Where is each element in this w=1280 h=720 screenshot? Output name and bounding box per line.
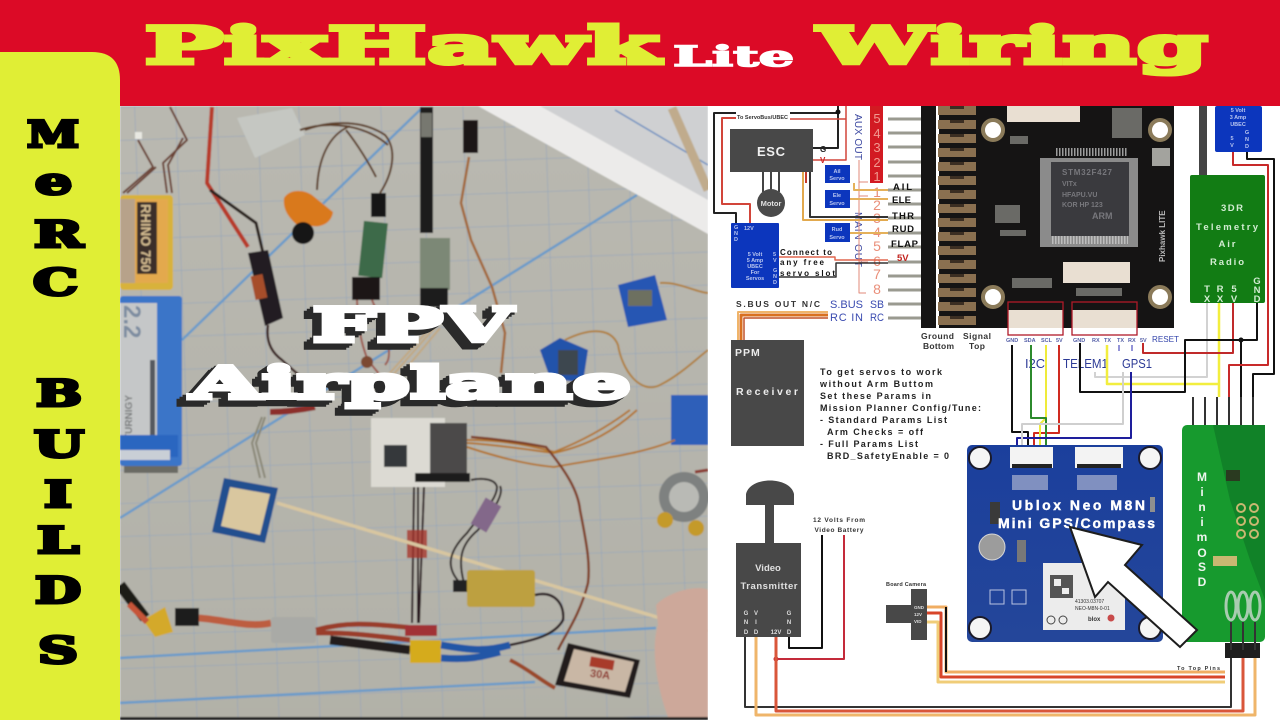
port labels I2C TELEM1 GPS1 bbox=[1025, 356, 1152, 371]
port labels I2C TELEM1 GPS1: I2C bbox=[1025, 356, 1045, 371]
arm params instructions: Set these Params in bbox=[820, 391, 931, 401]
servo UBEC box: G bbox=[734, 225, 738, 231]
3DR telemetry air radio: Telemetry bbox=[1196, 222, 1259, 233]
PPM receiver box: Receiver bbox=[736, 386, 798, 398]
video transmitter: D bbox=[787, 630, 792, 636]
wooden pointer stick bbox=[277, 503, 708, 632]
servo UBEC box: For bbox=[751, 270, 760, 276]
motor: Motor bbox=[761, 199, 781, 208]
servo boxes: Ail bbox=[833, 169, 841, 175]
blue lipo battery: TURNIGY bbox=[124, 395, 135, 440]
video transmitter: N bbox=[787, 620, 791, 626]
M8N module: blox bbox=[1088, 617, 1101, 623]
motor bbox=[757, 172, 785, 217]
minimOSD board: M bbox=[1197, 470, 1207, 484]
aux out red bar: 1 bbox=[873, 169, 881, 184]
aux out red bar: 4 bbox=[873, 126, 881, 141]
video module with wires bbox=[237, 108, 392, 193]
to top pins label: To Top Pins bbox=[1177, 666, 1220, 672]
GPS connectors bbox=[1010, 447, 1123, 468]
main out numbers: 2 bbox=[873, 197, 881, 213]
arm params instructions: - Standard Params List bbox=[820, 415, 947, 425]
pin labels: GND SDA SCL 5V and telemetry: TX bbox=[1104, 338, 1111, 344]
title: PixHawk Lite Wiring: Lite bbox=[673, 40, 794, 73]
pin labels: GND SDA SCL 5V and telemetry: GND bbox=[1006, 338, 1018, 344]
left panel: MeRC BUILDS: U bbox=[34, 424, 84, 466]
S.BUS and RC labels: S.BUS OUT N/C bbox=[736, 299, 820, 309]
red power lead and small ESC bbox=[207, 107, 315, 412]
main out numbers: 8 bbox=[873, 281, 881, 297]
servo UBEC box: G bbox=[773, 268, 777, 274]
large white arrow pointing at GPS bbox=[1070, 527, 1197, 647]
GPS board title bbox=[998, 497, 1155, 531]
main out numbers: 7 bbox=[873, 266, 881, 282]
left panel: MeRC BUILDS: L bbox=[37, 520, 79, 562]
aux out and main out vertical labels: MAIN OUT bbox=[852, 212, 863, 267]
5V label: 5V bbox=[897, 253, 909, 264]
S.BUS and RC labels: RC IN bbox=[830, 312, 863, 324]
servo UBEC box: 5 bbox=[773, 252, 776, 258]
pin labels: GND SDA SCL 5V and telemetry: GND bbox=[1073, 338, 1085, 344]
video transmitter: G bbox=[787, 611, 792, 617]
3DR telemetry air radio: T bbox=[1204, 284, 1210, 295]
3DR telemetry air radio: V bbox=[1231, 294, 1238, 305]
pin labels: GND SDA SCL 5V and telemetry: 5V bbox=[1140, 338, 1147, 344]
minimOSD board bbox=[1182, 425, 1265, 642]
main out numbers: 6 bbox=[873, 253, 881, 269]
ground bottom signal top labels bbox=[921, 331, 991, 351]
mounting holes bbox=[969, 447, 1161, 639]
5 volt 3 amp UBEC: UBEC bbox=[1230, 122, 1246, 128]
video transmitter: N bbox=[744, 620, 748, 626]
arm params instructions: Arm Checks = off bbox=[827, 427, 924, 437]
servo boxes bbox=[825, 165, 850, 242]
pin labels: GND SDA SCL 5V and telemetry: RX bbox=[1092, 338, 1100, 344]
telemetry radio with antenna bbox=[388, 107, 450, 378]
S.BUS and RC labels: SB bbox=[870, 299, 884, 311]
3DR telemetry air radio: 3DR bbox=[1221, 203, 1243, 214]
photo title: FPV Airplane: Airplane bbox=[179, 365, 622, 415]
GPS board title: Ublox Neo M8N bbox=[1012, 497, 1145, 513]
GPS board title: Mini GPS/Compass bbox=[998, 515, 1155, 531]
board camera bbox=[886, 582, 927, 640]
left panel: MeRC BUILDS: C bbox=[33, 262, 78, 304]
5 volt 3 amp UBEC bbox=[1215, 106, 1262, 152]
left panel: MeRC BUILDS: D bbox=[35, 570, 81, 612]
servo channel labels: RUD bbox=[892, 224, 914, 235]
5 volt 3 amp UBEC: D bbox=[1245, 144, 1249, 150]
left panel: MeRC BUILDS bbox=[0, 52, 120, 720]
12 volts label: Video Battery bbox=[814, 527, 864, 534]
flight controller with servo wires bbox=[371, 410, 675, 650]
aux out and main out vertical labels bbox=[852, 114, 863, 267]
board silk text: Pixhawk LITE bbox=[1158, 210, 1167, 262]
servo boxes: Servo bbox=[829, 176, 845, 182]
OSD bottom connector bbox=[1225, 622, 1260, 658]
OSD top header pins bbox=[1193, 397, 1253, 428]
photo title: FPV Airplane bbox=[179, 298, 631, 415]
pin labels: GND SDA SCL 5V and telemetry bbox=[1006, 338, 1147, 344]
arm params instructions bbox=[819, 367, 981, 461]
main power harness bbox=[120, 585, 555, 688]
connect to any free servo slot note: servo slot bbox=[780, 269, 835, 278]
left panel: MeRC BUILDS: B bbox=[36, 373, 82, 415]
ground bottom signal top labels: Signal bbox=[963, 331, 991, 341]
camera wires to top pins bbox=[927, 607, 1225, 682]
orange FPV camera bbox=[284, 191, 333, 244]
PPM receiver box bbox=[731, 340, 804, 446]
pin labels: GND SDA SCL 5V and telemetry: 5V bbox=[1056, 338, 1063, 344]
main out numbers bbox=[873, 184, 881, 297]
STM32 processor bbox=[1040, 152, 1138, 247]
photo title: FPV Airplane: FPV bbox=[306, 302, 510, 356]
connect to any free servo slot note: Connect to bbox=[780, 248, 832, 257]
aux out and main out vertical labels: AUX OUT bbox=[852, 114, 863, 160]
servo UBEC box: D bbox=[734, 237, 738, 243]
3DR telemetry air radio: N bbox=[1254, 285, 1261, 296]
S.BUS and RC labels bbox=[736, 299, 884, 324]
STM32 processor: STM32F427 bbox=[1062, 168, 1113, 177]
3DR telemetry air radio: G bbox=[1253, 276, 1261, 287]
minimOSD board: m bbox=[1197, 530, 1207, 544]
servo UBEC box: V bbox=[773, 258, 777, 264]
GPS patch antenna bbox=[212, 417, 278, 543]
aux out red bar: 5 bbox=[873, 111, 881, 126]
thin main out bus bbox=[859, 160, 868, 293]
servo boxes: Ele bbox=[833, 193, 841, 199]
3DR telemetry air radio bbox=[1190, 175, 1265, 305]
5 volt 3 amp UBEC: G bbox=[1245, 130, 1249, 136]
5 volt 3 amp UBEC: V bbox=[1230, 143, 1234, 149]
photo panel: FPV airplane parts on cutting mat bbox=[118, 106, 709, 720]
servo lead with connector bbox=[461, 120, 505, 373]
white foam wing bbox=[478, 106, 708, 234]
red title banner bbox=[0, 0, 1280, 106]
5 volt 3 amp UBEC: N bbox=[1245, 137, 1249, 143]
title: PixHawk Lite Wiring: Wiring bbox=[815, 16, 1208, 75]
ESC box bbox=[730, 129, 813, 172]
12 volts label: 12 Volts From bbox=[813, 517, 865, 524]
minimOSD board: i bbox=[1200, 485, 1204, 499]
STM32 processor: ARM bbox=[1092, 211, 1112, 221]
servo channel labels: FLAP bbox=[891, 239, 919, 250]
video transmitter: Transmitter bbox=[740, 581, 798, 592]
yellow lipo battery: RHINO 750 bbox=[138, 204, 154, 272]
arm params instructions: Mission Planner Config/Tune: bbox=[820, 403, 981, 413]
servo UBEC box: 12V bbox=[744, 226, 754, 232]
video transmitter: 12V bbox=[771, 630, 781, 636]
aux out red bar: 3 bbox=[873, 140, 881, 155]
servo UBEC box bbox=[731, 223, 779, 288]
5 volt 3 amp UBEC: 5 Volt bbox=[1231, 108, 1245, 114]
G and V labels bbox=[820, 145, 826, 165]
video transmitter bbox=[736, 480, 801, 637]
port labels I2C TELEM1 GPS1: TELEM1 bbox=[1063, 356, 1108, 371]
UBEC bbox=[451, 479, 563, 645]
blue micro servos bbox=[540, 275, 708, 445]
connect to any free servo slot note bbox=[780, 248, 835, 278]
video transmitter: D bbox=[754, 630, 759, 636]
minimOSD board: O bbox=[1197, 546, 1207, 560]
minimOSD board: D bbox=[1198, 575, 1207, 589]
STM32 processor: KOR HP 123 bbox=[1062, 202, 1103, 209]
3DR telemetry air radio: D bbox=[1254, 294, 1261, 305]
servo channel labels: THR bbox=[892, 211, 914, 222]
to servo bus label: To ServoBus/UBEC bbox=[737, 115, 788, 121]
brushless motor bbox=[657, 470, 709, 536]
hand holding stick bbox=[655, 588, 708, 717]
pin labels: GND SDA SCL 5V and telemetry: RX bbox=[1128, 338, 1136, 344]
3DR telemetry air radio: X bbox=[1204, 294, 1211, 305]
M8N module: NEO-M8N-0-01 bbox=[1075, 606, 1110, 612]
board camera: GND bbox=[914, 605, 925, 610]
main out numbers: 3 bbox=[873, 210, 881, 226]
left panel: MeRC BUILDS: R bbox=[34, 214, 85, 256]
title: PixHawk Lite Wiring: PixHawk bbox=[144, 16, 663, 75]
white connectors bbox=[1007, 106, 1137, 328]
ground bottom signal top labels: Ground bbox=[921, 331, 954, 341]
video transmitter: Video bbox=[755, 563, 781, 574]
servo UBEC box: 5 Amp bbox=[747, 258, 764, 264]
servo channel labels: ELE bbox=[892, 195, 911, 206]
main out numbers: 1 bbox=[873, 184, 881, 200]
M8N module: 41303.03707 bbox=[1075, 599, 1104, 605]
ESC wiring bbox=[714, 106, 888, 277]
minimOSD board: S bbox=[1198, 560, 1206, 574]
left panel: MeRC BUILDS: e bbox=[35, 161, 72, 203]
left panel: MeRC BUILDS: M bbox=[27, 114, 79, 156]
servo channel labels bbox=[891, 182, 919, 250]
ESC box: ESC bbox=[757, 144, 786, 159]
servo boxes: Rud bbox=[832, 227, 842, 233]
video transmitter: G bbox=[744, 611, 749, 617]
minimOSD board: n bbox=[1198, 500, 1206, 514]
board camera: VID bbox=[914, 619, 922, 624]
3DR telemetry air radio: Air bbox=[1218, 239, 1236, 250]
video transmitter: D bbox=[744, 630, 749, 636]
servo UBEC box: N bbox=[734, 231, 738, 237]
small GPS components bbox=[990, 475, 1155, 604]
5 volt 3 amp UBEC: 5 bbox=[1230, 136, 1234, 142]
servo UBEC box: D bbox=[773, 280, 777, 286]
photo title: FPV Airplane: Airplane bbox=[182, 363, 625, 413]
servo UBEC box: Servos bbox=[746, 276, 764, 282]
pixhawk lite flight controller board bbox=[921, 106, 1174, 335]
arm params instructions: To get servos to work bbox=[820, 367, 943, 377]
blue lipo battery: 2.2 bbox=[118, 305, 145, 338]
servo channel labels: AIL bbox=[893, 182, 912, 193]
3DR telemetry air radio: Radio bbox=[1210, 257, 1244, 268]
pin labels: GND SDA SCL 5V and telemetry: SDA bbox=[1024, 338, 1036, 344]
board camera: Board Camera bbox=[886, 582, 927, 588]
left panel: MeRC BUILDS: I bbox=[44, 474, 72, 516]
video transmitter: V bbox=[754, 611, 758, 617]
arm params instructions: - Full Params List bbox=[820, 439, 918, 449]
servo boxes: Servo bbox=[829, 201, 845, 207]
STM32 processor: HFAPU.VU bbox=[1062, 192, 1097, 199]
30A ESC: 30A bbox=[589, 668, 611, 682]
ground bottom signal top labels: Top bbox=[969, 341, 985, 351]
yellow lipo battery bbox=[120, 107, 187, 290]
main out numbers: 5 bbox=[873, 238, 881, 254]
reset label: RESET bbox=[1152, 334, 1179, 344]
main out numbers: 4 bbox=[873, 224, 881, 240]
wooden strip top right bbox=[672, 108, 708, 190]
G and V labels: G bbox=[820, 145, 826, 154]
servo UBEC box: UBEC bbox=[747, 264, 763, 270]
receiver signal wires bbox=[738, 312, 828, 340]
title: PixHawk Lite Wiring bbox=[144, 16, 1208, 75]
pin labels: GND SDA SCL 5V and telemetry: SCL bbox=[1041, 338, 1053, 344]
small components bbox=[995, 108, 1170, 296]
pin labels: GND SDA SCL 5V and telemetry: TX bbox=[1117, 338, 1124, 344]
video transmitter wires bbox=[745, 535, 1255, 715]
photo title: FPV Airplane: FPV bbox=[309, 300, 513, 354]
board camera: 12V bbox=[914, 612, 922, 617]
minimOSD board: i bbox=[1200, 515, 1204, 529]
3DR telemetry air radio: X bbox=[1217, 294, 1224, 305]
ground bottom signal top labels: Bottom bbox=[923, 341, 954, 351]
S.BUS and RC labels: S.BUS bbox=[830, 299, 863, 311]
blue lipo battery bbox=[118, 296, 182, 473]
aux out red bar bbox=[870, 106, 883, 184]
wiring diagram panel bbox=[708, 106, 1280, 720]
video transmitter: I bbox=[755, 620, 757, 626]
connect to any free servo slot note: any free bbox=[780, 258, 825, 267]
photo title: FPV Airplane: Airplane bbox=[188, 359, 631, 409]
servo UBEC box: N bbox=[773, 274, 777, 280]
compass knob bbox=[979, 534, 1005, 560]
port labels I2C TELEM1 GPS1: GPS1 bbox=[1122, 356, 1152, 371]
wires: board to telemetry, GPS, OSD bbox=[1012, 106, 1274, 457]
3DR telemetry air radio: 5 bbox=[1231, 284, 1237, 295]
GPS compass board bbox=[967, 445, 1163, 642]
S.BUS and RC labels: RC bbox=[870, 312, 884, 324]
mounting holes bbox=[983, 120, 1170, 307]
12 volts label bbox=[813, 517, 865, 534]
3DR telemetry air radio: R bbox=[1217, 284, 1224, 295]
PPM receiver box: PPM bbox=[735, 347, 761, 359]
arm params instructions: without Arm Buttom bbox=[819, 379, 933, 389]
photo title: FPV Airplane: FPV bbox=[303, 304, 507, 358]
servo boxes: Servo bbox=[829, 235, 845, 241]
30A ESC bbox=[555, 643, 640, 698]
left panel: MeRC BUILDS: S bbox=[38, 630, 78, 672]
G and V labels: V bbox=[820, 156, 826, 165]
output pin header bbox=[888, 119, 921, 318]
aux out red bar: 2 bbox=[873, 155, 881, 170]
STM32 processor: VITx bbox=[1062, 181, 1077, 188]
connector highlight outlines bbox=[1008, 302, 1137, 335]
M8N module bbox=[1043, 563, 1125, 630]
5 volt 3 amp UBEC: 3 Amp bbox=[1230, 115, 1247, 121]
minimOSD on wires bbox=[352, 193, 389, 375]
photo title: FPV Airplane: FPV bbox=[312, 298, 516, 352]
photo title: FPV Airplane: Airplane bbox=[185, 361, 628, 411]
servo UBEC box: 5 Volt bbox=[748, 252, 762, 258]
arm params instructions: BRD_SafetyEnable = 0 bbox=[827, 451, 949, 461]
